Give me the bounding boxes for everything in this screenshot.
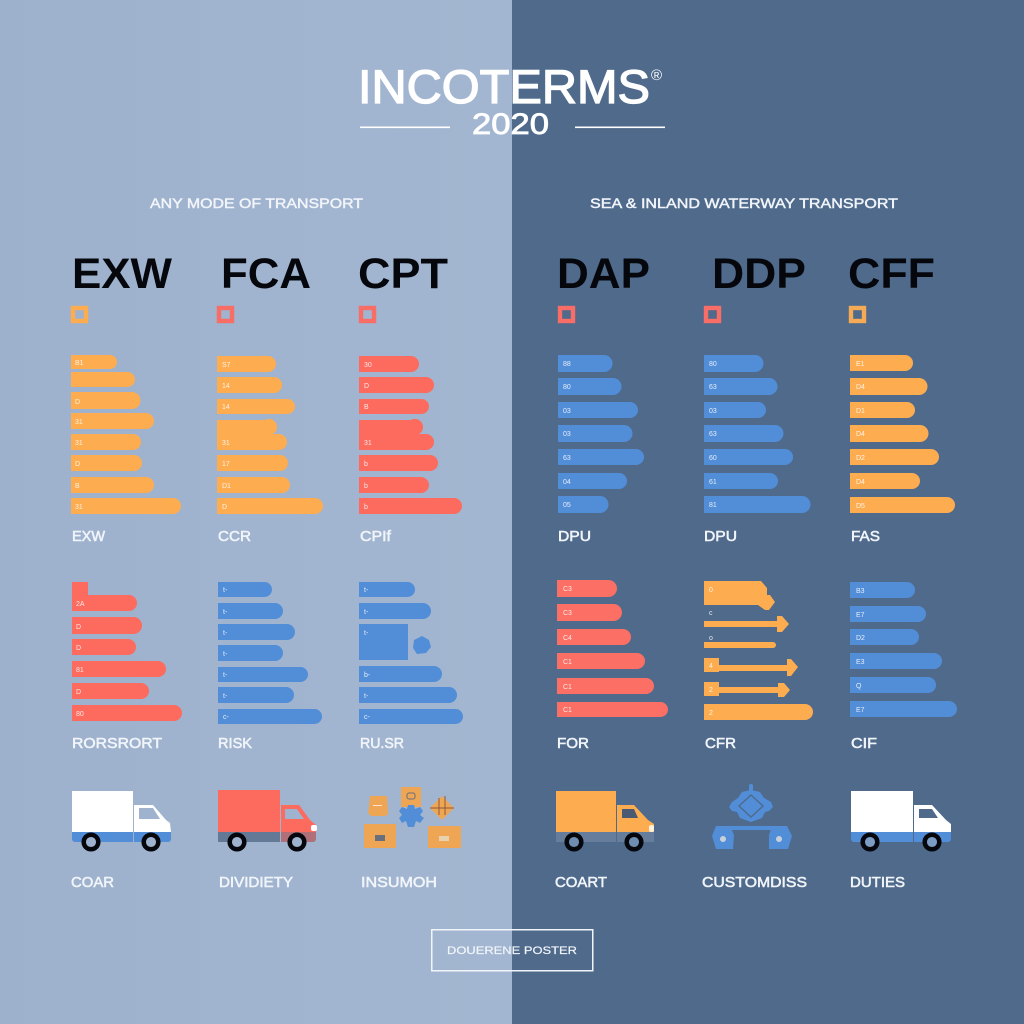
chart: EXW bars: 31 (75, 440, 83, 447)
title: INCOTERMS (358, 60, 650, 113)
heading: any mode of transport: ANY MODE OF TRANSPORT (150, 195, 363, 211)
chart: CPT bars: 30 (364, 362, 372, 369)
chart: CFF bars: D1 (856, 408, 865, 415)
chart: DDP bars: 60 (709, 455, 717, 462)
row one labels: FAS (851, 528, 880, 545)
chart: CPT bars (359, 356, 462, 514)
icon: white truck (72, 791, 171, 849)
row one labels: DPU (704, 528, 737, 545)
chart: DDP bars: 63 (709, 384, 717, 391)
chart: for bars: C3 (563, 586, 572, 593)
chart: EXW bars: D (75, 461, 80, 468)
chart: rusr bars: t- (364, 587, 369, 594)
chart: CPT bars: b (364, 461, 368, 468)
chart: rusr bars: t- (364, 693, 369, 700)
chart: CPT bars: b (364, 483, 368, 490)
row one labels (72, 528, 880, 545)
chart: cfr arrows: o (709, 635, 713, 642)
chart: DDP bars (704, 355, 810, 513)
chart: CFF bars: D4 (856, 479, 865, 486)
row two labels (72, 735, 877, 752)
chart: EXW bars: B1 (75, 360, 84, 367)
icon: white truck right (851, 791, 951, 849)
chart: rusr bars: c- (364, 714, 370, 721)
chart: DAP bars: 03 (563, 408, 571, 415)
chart: cif bars: B3 (856, 588, 865, 595)
chart: EXW bars: 31 (75, 419, 83, 426)
chart: cfr arrows: c (709, 610, 713, 617)
chart: DDP bars: 81 (709, 502, 717, 509)
chart: cfr arrows: 2 (709, 687, 713, 694)
chart: second row red bars: D (76, 645, 81, 652)
icon: customs (712, 784, 792, 849)
chart: for bars: C1 (563, 659, 572, 666)
term headings: FCA (221, 250, 311, 298)
row two labels: RISK (218, 735, 252, 752)
chart: cfr arrows: 0 (709, 587, 713, 594)
chart: second row red bars: D (76, 624, 81, 631)
chart: cif bars: D2 (856, 635, 865, 642)
chart: DAP bars: 04 (563, 479, 571, 486)
chart: cif bars: E3 (856, 659, 865, 666)
icon: insurance cluster (364, 787, 461, 848)
chart: risk bars: t- (223, 651, 228, 658)
chart: risk bars: t- (223, 693, 228, 700)
row three labels: COART (555, 874, 607, 891)
chart: FCA bars: D (222, 504, 227, 511)
title: 2020 (472, 108, 549, 141)
chart: EXW bars: D (75, 399, 80, 406)
chart: FCA bars: 31 (222, 440, 230, 447)
chart: cif bars: Q (856, 683, 862, 690)
chart: CFF bars: D4 (856, 431, 865, 438)
row one labels: CCR (218, 528, 251, 545)
chart: second row red bars: 2A (76, 601, 85, 608)
chart: FCA bars: 14 (222, 404, 230, 411)
chart: DAP bars: 80 (563, 384, 571, 391)
chart: rusr bars: b- (364, 672, 371, 679)
title: ® (651, 67, 662, 84)
chart: cif bars: E7 (856, 612, 865, 619)
chart: cfr arrows: 4 (709, 663, 713, 670)
chart: risk bars: t- (223, 630, 228, 637)
chart: second row red bars: 80 (76, 711, 84, 718)
chart: DDP bars: 63 (709, 431, 717, 438)
heading: sea and inland waterway transport: SEA & INLAND WATERWAY TRANSPORT (590, 195, 899, 211)
icon: red truck (218, 790, 317, 849)
term headings: CPT (358, 250, 448, 298)
chart: rusr bars: t- (364, 609, 369, 616)
chart: CPT bars: 31 (364, 440, 372, 447)
row two labels: RORSRORT (72, 735, 162, 752)
chart: DAP bars: 88 (563, 361, 571, 368)
row three labels: COAR (71, 874, 114, 891)
chart: FCA bars: D1 (222, 483, 231, 490)
chart: FCA bars: 14 (222, 383, 230, 390)
button: download poster: DOUERENE POSTER (447, 945, 577, 957)
row two labels: CIF (851, 735, 877, 752)
row one labels: EXW (72, 528, 106, 545)
chart: cif bars (850, 582, 957, 717)
chart: EXW bars: B (75, 483, 80, 490)
chart: DDP bars: 61 (709, 479, 717, 486)
chart: cfr arrows: 2 (709, 710, 713, 717)
chart: for bars: C4 (563, 635, 572, 642)
chart: cfr arrows (704, 581, 813, 720)
chart: DAP bars: 05 (563, 502, 571, 509)
chart: rusr bars: t- (364, 630, 369, 637)
chart: for bars: C1 (563, 684, 572, 691)
chart: risk bars: c- (223, 714, 230, 721)
chart: risk bars: t- (223, 609, 228, 616)
panel: sea and inland waterway background (512, 0, 1024, 1024)
row one labels: CPIf (360, 528, 392, 545)
chart: FCA bars (217, 356, 323, 514)
chart: rusr bars (359, 582, 463, 724)
icon: orange truck (556, 791, 654, 849)
button: download poster (432, 930, 593, 971)
row two labels: FOR (557, 735, 589, 752)
term headings: EXW (72, 250, 172, 298)
term headings: DDP (712, 250, 806, 298)
panel: any mode of transport background (0, 0, 512, 1024)
term headings: CFF (848, 250, 935, 298)
chart: DAP bars: 03 (563, 431, 571, 438)
chart: EXW bars (71, 355, 181, 514)
chart: for bars: C1 (563, 707, 572, 714)
chart: DDP bars: 80 (709, 361, 717, 368)
row three labels: DIVIDIETY (219, 874, 293, 891)
row three labels: CUSTOMDISS (702, 874, 807, 891)
chart: CFF bars: D2 (856, 455, 865, 462)
chart: DDP bars: 03 (709, 408, 717, 415)
row two labels: CFR (705, 735, 736, 752)
chart: cif bars: E7 (856, 707, 865, 714)
row three labels (71, 874, 905, 891)
chart: second row red bars: 81 (76, 667, 84, 674)
chart: FCA bars: S7 (222, 362, 231, 369)
chart: second row red bars: D (76, 689, 81, 696)
chart: for bars (557, 580, 668, 717)
chart: risk bars: t- (223, 672, 228, 679)
chart: second row red bars (72, 582, 182, 721)
chart: CPT bars: b (364, 504, 368, 511)
row three labels: DUTIES (850, 874, 905, 891)
row two labels: RU.SR (360, 735, 404, 752)
chart: EXW bars: 31 (75, 504, 83, 511)
title (358, 60, 665, 141)
chart: risk bars: t- (223, 587, 228, 594)
chart: risk bars (218, 582, 322, 724)
row one labels: DPU (558, 528, 591, 545)
chart: CPT bars: D (364, 383, 369, 390)
term headings (72, 250, 935, 298)
chart: FCA bars: 17 (222, 461, 230, 468)
term headings: DAP (557, 250, 650, 298)
chart: CFF bars: D5 (856, 503, 865, 510)
row three labels: INSUMOH (361, 874, 437, 891)
chart: DAP bars (558, 355, 644, 513)
chart: CFF bars (850, 355, 955, 513)
chart: DAP bars: 63 (563, 455, 571, 462)
chart: CFF bars: D4 (856, 384, 865, 391)
chart: CPT bars: B (364, 404, 369, 411)
chart: for bars: C3 (563, 610, 572, 617)
marker squares (73, 308, 864, 321)
chart: CFF bars: E1 (856, 361, 865, 368)
